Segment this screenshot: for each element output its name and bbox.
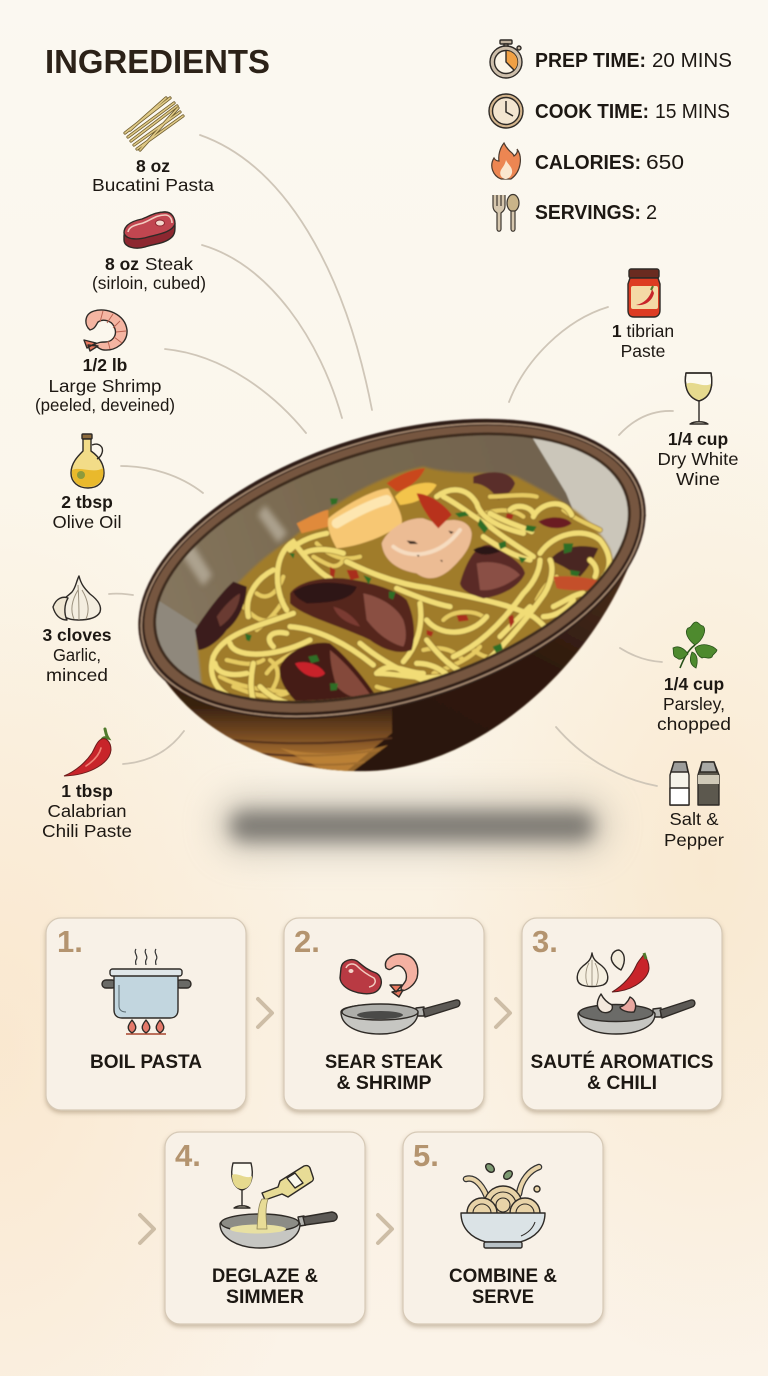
ingredient: shrimp: Large Shrimp: [48, 376, 162, 396]
ingredient: tibrian paste: 1 tibrian: [612, 321, 674, 341]
step 4: deglaze card: [165, 1132, 365, 1324]
ingredient: dry white wine: Wine: [676, 469, 720, 489]
ingredient: steak: [92, 212, 206, 293]
food base: [197, 467, 617, 708]
icon: paste jar: [628, 269, 660, 317]
pasta over shrimp: [347, 562, 430, 588]
ingredient: chili paste: Calabrian: [48, 801, 126, 821]
step 5: combine card: [403, 1132, 603, 1324]
icon: clock: [489, 94, 523, 128]
meta: cook time: COOK TIME:: [535, 101, 649, 123]
ingredient: garlic: minced: [46, 665, 108, 685]
ingredient: salt and pepper: [664, 762, 724, 850]
ingredient: chili paste: 1 tbsp: [61, 781, 113, 801]
meta: servings: 2: [646, 202, 657, 224]
icon: shrimp: [84, 310, 127, 351]
step 3: saute aromatics card: [522, 918, 722, 1110]
ingredient: parsley: chopped: [657, 714, 731, 734]
step 1: boil pasta card: 1.: [57, 924, 83, 959]
title: INGREDIENTS: [45, 43, 270, 80]
ingredient: garlic: [42, 576, 112, 685]
ingredient: chili paste: Chili Paste: [42, 821, 132, 841]
meat: left chunk: [195, 582, 247, 650]
ingredient: parsley: Parsley,: [663, 694, 725, 714]
chevron: [258, 999, 272, 1027]
ingredient: garlic: Garlic,: [53, 645, 101, 665]
icon: olive oil bottle: [71, 434, 104, 488]
meat: right: [460, 545, 525, 598]
meat: lower: [280, 643, 377, 707]
ingredient: bucatini pasta: 8 oz: [136, 156, 170, 176]
connector lines: [109, 135, 673, 786]
pasta and toppings: [195, 467, 617, 708]
step 2: sear steak card: [284, 918, 484, 1110]
shrimp: large orange: [328, 488, 402, 548]
step 2: sear steak card: 2.: [294, 924, 320, 959]
icon: garlic and chili over pan: [577, 950, 695, 1034]
meta: calories: CALORIES:: [535, 152, 641, 174]
ingredient: shrimp: 1/2 lb: [83, 355, 127, 375]
meta: servings: SERVINGS:: [535, 202, 641, 224]
ingredient: parsley: 1/4 cup: [664, 674, 724, 694]
icon: bowl of noodles: [461, 1162, 545, 1248]
bowl shadow: [215, 795, 610, 855]
icon: wine pouring into pan: [220, 1163, 337, 1248]
ingredient: bucatini pasta: [92, 98, 214, 195]
icon: parsley: [673, 622, 717, 668]
step 3: saute aromatics card: 3.: [532, 924, 558, 959]
ingredient: olive oil: Olive Oil: [52, 512, 122, 532]
steps: row one: [46, 918, 722, 1110]
ingredient: salt and pepper: Salt &: [670, 809, 719, 829]
hero: bowl of pasta: [137, 418, 647, 772]
shrimp: right: [553, 576, 607, 590]
icon: wine glass: [685, 373, 712, 424]
meta: cook time: 15 MINS: [655, 101, 730, 123]
ingredient: dry white wine: 1/4 cup: [668, 429, 728, 449]
step 2: sear steak card: SEAR STEAK: [325, 1051, 443, 1073]
step 3: saute aromatics card: SAUTÉ AROMATICS: [530, 1050, 714, 1073]
icon: garlic: [53, 576, 101, 620]
step 4: deglaze card: 4.: [175, 1138, 201, 1173]
shrimp tails: [297, 468, 437, 533]
icon: steak and shrimp over pan: [340, 954, 460, 1034]
icon: steak: [124, 212, 175, 248]
ingredient: shrimp: (peeled, deveined): [35, 395, 175, 415]
icon: salt and pepper shakers: [670, 762, 719, 805]
icon: stopwatch: [490, 40, 522, 78]
steps: row two: [140, 1132, 603, 1324]
icon: pasta bundle: [125, 98, 183, 150]
meat: center: [290, 578, 414, 652]
chevron: [378, 1215, 392, 1243]
chevron: [496, 999, 510, 1027]
meta: prep time: [490, 40, 732, 78]
ingredient: chili paste: [42, 729, 132, 841]
meta: servings: [493, 194, 657, 231]
icon: flame: [492, 143, 520, 179]
ingredient: dry white wine: [658, 373, 738, 489]
step 4: deglaze card: DEGLAZE &: [212, 1265, 318, 1287]
ingredient: garlic: 3 cloves: [42, 625, 112, 645]
ingredient: steak: (sirloin, cubed): [92, 273, 206, 293]
shrimp: curled: [382, 493, 472, 578]
meta: prep time: PREP TIME:: [535, 50, 646, 72]
step 5: combine card: 5.: [413, 1138, 439, 1173]
ingredient: bucatini pasta: Bucatini Pasta: [92, 175, 214, 195]
under strands: [220, 495, 600, 696]
icon: pot on burner: [102, 949, 191, 1034]
step 3: saute aromatics card: & CHILI: [587, 1072, 657, 1094]
ingredient: salt and pepper: Pepper: [664, 830, 724, 850]
ingredient: tibrian paste: Paste: [621, 341, 665, 361]
step 5: combine card: SERVE: [472, 1286, 534, 1308]
ingredient: tibrian paste: [612, 269, 674, 361]
ingredient: olive oil: 2 tbsp: [61, 492, 113, 512]
step 1: boil pasta card: [46, 918, 246, 1110]
ingredient: steak: Steak: [145, 254, 193, 274]
meta: cook time: [489, 94, 730, 128]
bowl rim and interior: [137, 418, 647, 720]
ingredient: dry white wine: Dry White: [658, 449, 738, 469]
step 1: boil pasta card: BOIL PASTA: [90, 1051, 202, 1073]
parsley and chili flecks: [245, 498, 580, 691]
bowl exterior: [165, 514, 647, 772]
icon: red chili: [64, 729, 111, 776]
ingredient: steak: 8 oz: [105, 254, 139, 274]
meta: calories: 650: [646, 152, 684, 174]
ingredient: olive oil: [52, 434, 122, 532]
back meat: [473, 472, 598, 577]
chevron: [140, 1215, 154, 1243]
ingredient: parsley: [657, 622, 731, 734]
step 4: deglaze card: SIMMER: [226, 1286, 304, 1308]
step 2: sear steak card: & SHRIMP: [336, 1072, 432, 1094]
ingredient: shrimp: [35, 310, 175, 415]
meta: calories: [492, 143, 684, 179]
icon: fork and spoon: [493, 194, 519, 231]
pasta strands: [212, 490, 609, 705]
step 5: combine card: COMBINE &: [449, 1265, 557, 1287]
meta: prep time: 20 MINS: [652, 50, 732, 72]
